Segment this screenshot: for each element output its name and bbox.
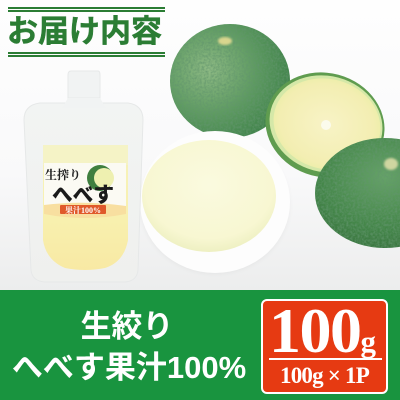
bowl of juice [140, 131, 290, 273]
badge rule [269, 358, 382, 360]
label wave [44, 203, 126, 218]
banner text [12, 309, 246, 385]
badge detail: 100g × 1P [280, 363, 369, 388]
juice fill [43, 145, 128, 270]
fruit: cut half [254, 59, 396, 191]
pouch label [44, 163, 126, 218]
fruit: whole sudachi lower right [315, 138, 400, 248]
pouch body [24, 103, 143, 282]
badge: 100g [261, 299, 388, 394]
heading: お届け内容: お届け内容 [7, 14, 162, 49]
label lime [87, 165, 113, 191]
label text: 生搾り: 生搾り [45, 167, 81, 182]
badge amount: 100g [269, 295, 376, 366]
pouch cap [68, 71, 100, 98]
label text: へべす: へべす [52, 184, 114, 207]
background [0, 0, 400, 290]
green banner [0, 290, 400, 400]
fruit: whole sudachi top [170, 24, 290, 138]
banner line: 生絞り: 生絞り [80, 309, 174, 344]
banner line: へべす果汁100%: へべす果汁100% [12, 350, 246, 385]
label band: 果汁100%: 果汁100% [65, 205, 101, 215]
juice pouch [24, 71, 143, 282]
